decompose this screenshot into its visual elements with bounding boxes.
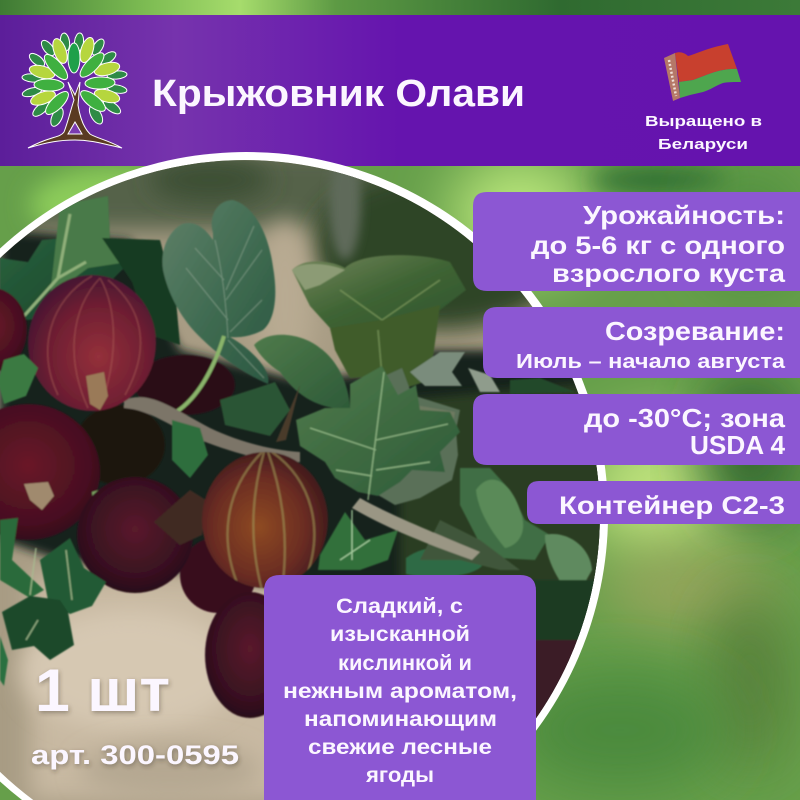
quantity: 1 шт — [35, 657, 170, 724]
berries behind — [0, 288, 256, 613]
berry: lower middle — [77, 477, 206, 593]
big grey-green leaf — [162, 200, 275, 412]
article number: арт. 300-0595 — [31, 740, 239, 770]
panel: taste description: кислинкой и — [338, 652, 472, 675]
text: grown in Belarus: Выращено в — [645, 113, 762, 130]
panel: taste description: изысканной — [330, 623, 470, 646]
panel: yield: Урожайность: — [583, 200, 785, 230]
header banner — [0, 15, 800, 166]
logo leaves — [21, 32, 128, 128]
panel: frost hardiness: USDA 4 — [690, 430, 786, 460]
berry: left dark — [0, 404, 100, 540]
photo backdrop — [0, 150, 620, 800]
berry: bottom dark — [204, 591, 264, 719]
text: grown in Belarus — [645, 113, 762, 153]
small right lobes — [406, 468, 593, 581]
text: grown in Belarus: Беларуси — [658, 136, 748, 153]
panel: taste description: ягоды — [365, 764, 434, 787]
panel: taste description: свежие лесные — [308, 736, 492, 759]
panel: yield: взрослого куста — [552, 260, 786, 288]
panel: ripening — [483, 307, 800, 378]
panel: ripening: Созревание: — [605, 316, 785, 346]
panel: taste description: напоминающим — [304, 708, 497, 731]
title: Крыжовник Олави — [152, 73, 525, 115]
lower right leaves — [318, 510, 600, 720]
panel: frost hardiness — [473, 394, 800, 465]
dark shadow mass behind branches — [0, 226, 600, 718]
panel: yield: до 5-6 кг с одного — [531, 232, 785, 260]
icon: Belarus flag — [664, 44, 741, 101]
berry: striped orange — [202, 452, 328, 590]
panel: taste description — [264, 575, 536, 800]
logo trunk and roots — [28, 82, 122, 148]
white circle frame — [0, 152, 608, 800]
panel: taste description: Сладкий, с — [336, 595, 463, 618]
photo: gooseberry branch in circle — [0, 150, 620, 800]
panel: frost hardiness: до -30°C; зона — [584, 403, 786, 433]
berry: large upper red — [0, 275, 156, 411]
panel: ripening: Июль – начало августа — [516, 351, 786, 373]
front branch — [124, 382, 480, 560]
olive leaves top right — [254, 255, 575, 410]
panel: taste description: нежным ароматом, — [283, 680, 517, 703]
main green leaf — [296, 366, 460, 500]
grey-red leaf right of main leaf — [376, 368, 460, 505]
logo: tree — [21, 32, 128, 148]
panel: yield — [473, 192, 800, 291]
panel: container — [527, 481, 800, 524]
small green leaves lower left — [0, 420, 208, 686]
leaf: top left — [0, 196, 180, 345]
panel: container: Контейнер С2-3 — [559, 492, 785, 520]
